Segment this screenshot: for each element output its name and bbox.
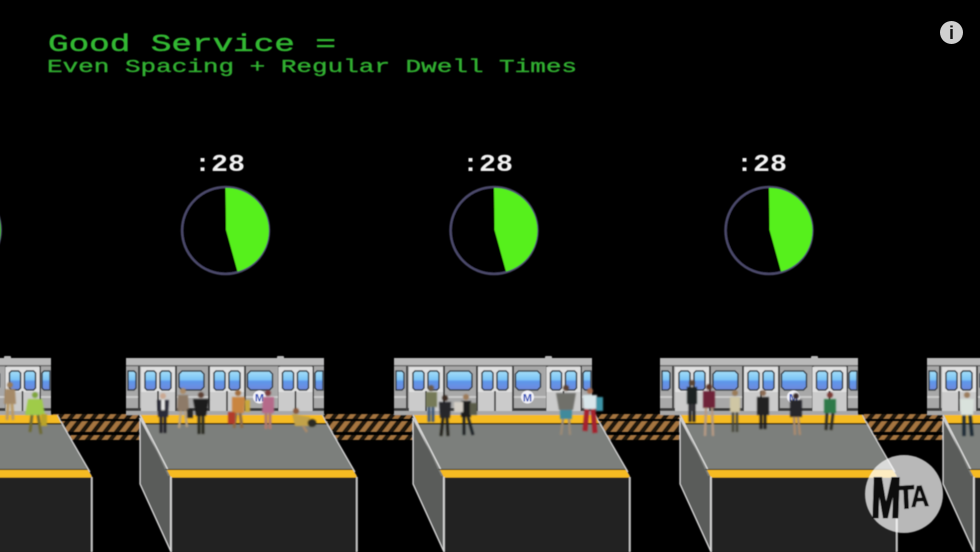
- logo: MTA: M: [871, 467, 902, 529]
- passengers on platform 1: [157, 388, 316, 434]
- icon: info button: [940, 21, 963, 44]
- clock 1: 28 seconds: [182, 187, 269, 274]
- train 2: [394, 356, 592, 415]
- logo: MTA: [865, 455, 943, 533]
- clock 2: 28 seconds: [450, 187, 538, 274]
- train 2: M: [523, 392, 532, 404]
- logo: MTA: T: [897, 479, 916, 517]
- passengers: [4, 380, 974, 436]
- clock label 3: :28: [736, 152, 787, 179]
- passengers on platform 0: [4, 382, 47, 434]
- train 1: [126, 356, 324, 415]
- track hazard stripes: [0, 414, 980, 440]
- clock label 2: :28: [462, 152, 513, 179]
- train 3: [660, 356, 858, 415]
- train 3: M: [789, 392, 798, 404]
- platform 0: [0, 415, 93, 552]
- subtitle: Even Spacing + Regular Dwell Times: [47, 58, 577, 78]
- train 0, partly off the left edge: [0, 356, 51, 415]
- passengers on platform 2: [426, 385, 603, 436]
- clock label 1: :28: [194, 152, 245, 179]
- platform 4: [943, 415, 980, 552]
- passengers on platform 3: [687, 380, 836, 436]
- clock 0, partly off the left edge: [0, 185, 1, 274]
- platform 3: [680, 415, 898, 552]
- platform 2: [413, 415, 631, 552]
- train 4, partly off the right edge: [927, 356, 980, 415]
- train 1: M: [255, 392, 264, 404]
- logo: MTA: A: [910, 479, 930, 513]
- title: Good Service =: [48, 32, 336, 59]
- passenger on platform 4: [960, 392, 974, 436]
- icon: info button: i: [949, 23, 954, 43]
- platform 1: [140, 415, 358, 552]
- clock 3: 28 seconds: [726, 187, 812, 274]
